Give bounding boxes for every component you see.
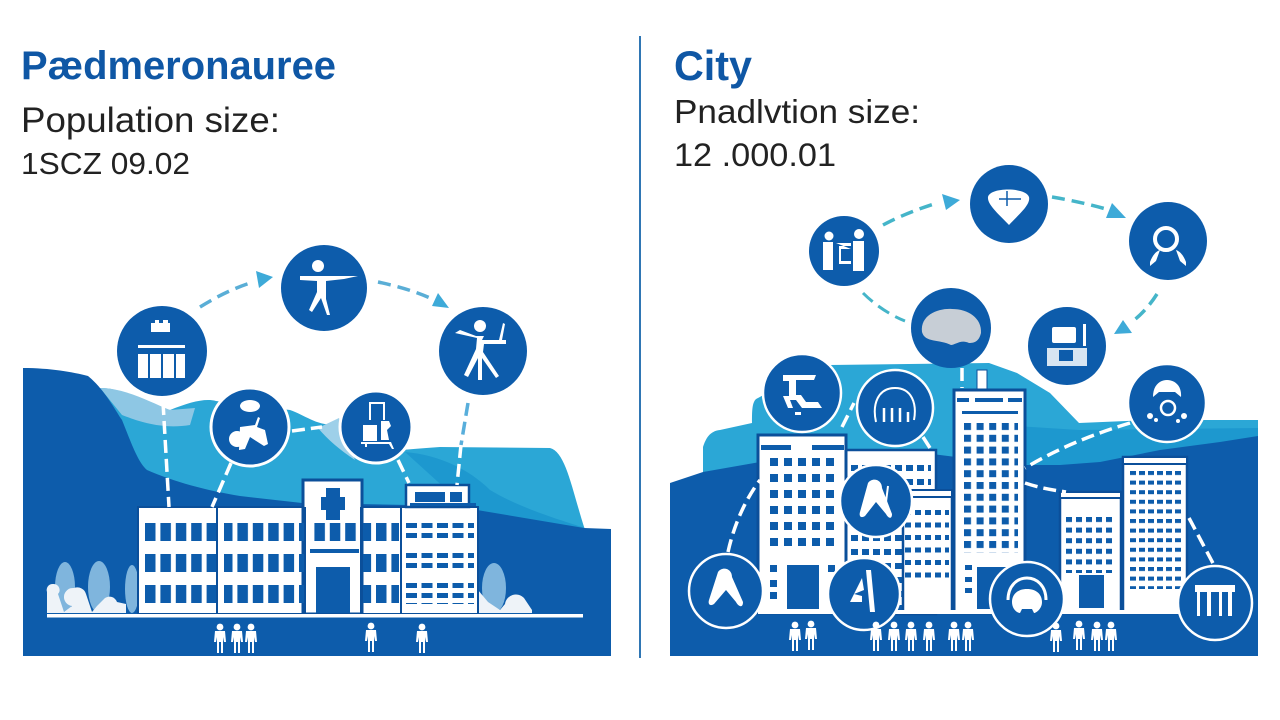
trees: left [47,561,532,613]
icon: figure circle left [689,554,763,628]
icon: heart circle [970,165,1048,243]
people: right groups [789,621,1117,652]
building: left tower [758,435,846,613]
connectors: left white dashes [163,402,461,507]
panel: city scene [670,165,1258,656]
icon: two people circle [809,216,879,286]
building: hospital [138,480,478,614]
arrow: right upper first [883,194,960,225]
connectors: right white dashes [728,368,1215,567]
building: center tower [954,370,1025,613]
icon: device circle [1028,307,1106,385]
label: left population size: Population size: [21,101,280,140]
icon: headset circle [857,370,933,446]
icon: figure circle center [840,465,912,537]
icon: machine circle [340,391,412,463]
icon: machinery circle [763,354,841,432]
value: right population: 12 .000.01 [674,137,836,173]
hills: left background [23,368,611,656]
icon: cluster circle right [1128,364,1206,442]
label: right population size: Pnadlvtion size: [674,93,920,130]
icon: brain circle [911,288,991,368]
hills: right background [670,363,1258,656]
building: low block [903,490,952,613]
people: left groups [214,623,428,653]
building: back block [846,450,936,615]
arrow: right side down [1114,294,1157,334]
title: left panel: Pædmeronauree [21,44,336,88]
building: right low block [1060,492,1121,613]
title: right panel: City [674,42,753,89]
connector: left loop [863,293,905,321]
icon: figure with tools circle [439,307,527,395]
icon: equipment circle [117,306,207,396]
icon: figure circle lower [828,558,900,630]
arrow: left upper second [378,282,449,308]
icon: elephant circle [990,562,1064,636]
icon: person with arms out circle [281,245,367,331]
panel: hospital scene [23,245,611,656]
icon: head circle [1129,202,1207,280]
building: right tower [1123,457,1187,613]
arrow: right upper second [1052,197,1126,218]
icon: group circle [1178,566,1252,640]
arrow: left upper first [200,271,273,307]
icon: cluster circle [211,388,289,466]
value: left population: 1SCZ 09.02 [21,146,190,181]
